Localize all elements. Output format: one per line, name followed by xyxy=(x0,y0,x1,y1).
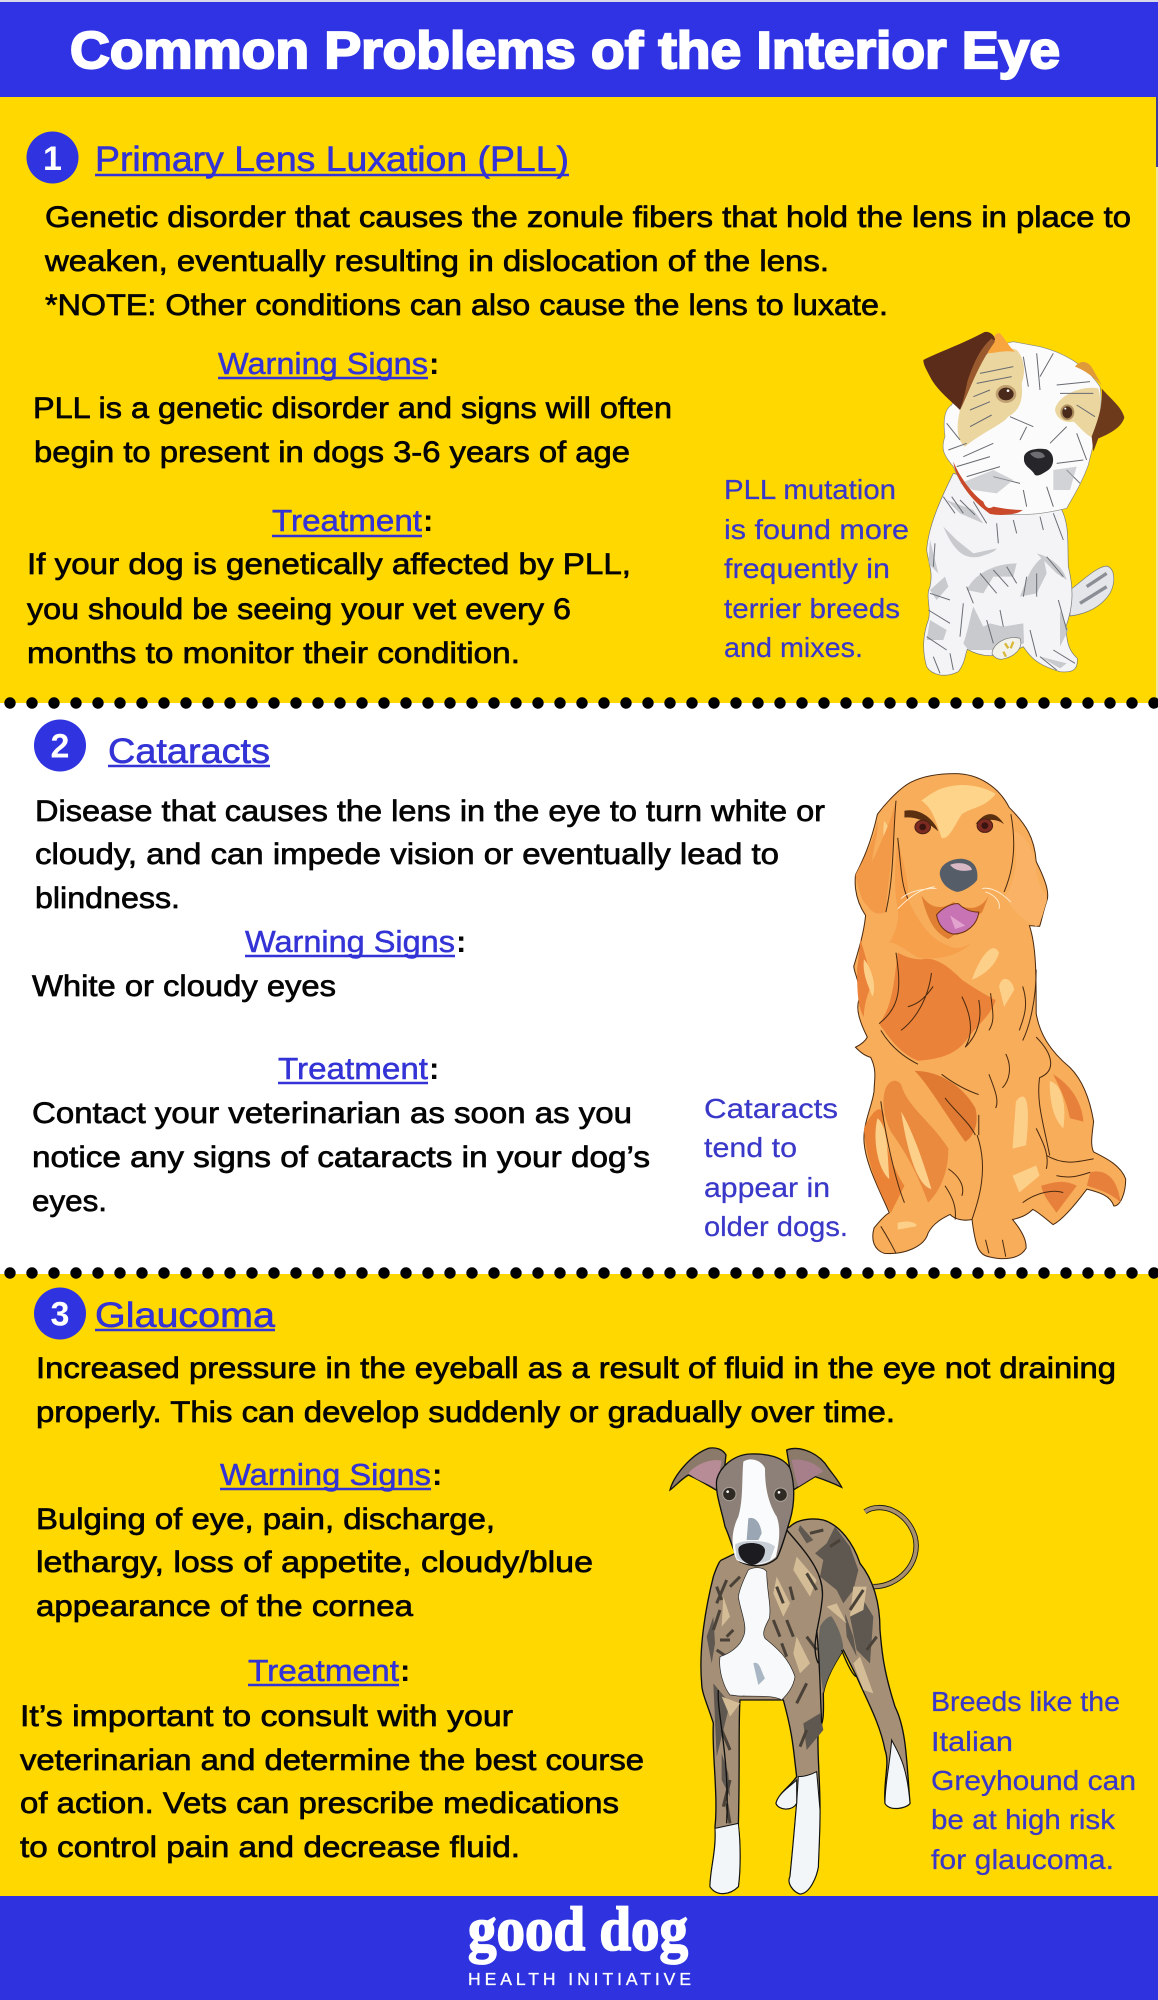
callout: terrier breeds note: terrier breeds xyxy=(724,593,900,624)
badge: number 3 xyxy=(34,1288,86,1340)
text block: PLL warning signs xyxy=(33,392,672,469)
text block: glaucoma treatment: It’s important to consult with your xyxy=(20,1700,513,1733)
subheading: cataracts warning signs: Warning Signs xyxy=(245,924,455,959)
subheading: PLL treatment: : xyxy=(423,503,433,538)
logo tagline: HEALTH INITIATIVE xyxy=(468,1969,691,1989)
text block: cataracts treatment: notice any signs of cataracts in your dog’s xyxy=(32,1141,650,1174)
callout: terrier breeds note: PLL mutation xyxy=(724,474,896,505)
callout: older dogs note xyxy=(704,1093,848,1242)
text block: PLL treatment: months to monitor their condition. xyxy=(27,637,520,670)
subheading: PLL warning signs: : xyxy=(429,346,439,381)
text block: cataracts warning signs: White or cloudy eyes xyxy=(32,970,336,1003)
text block: PLL treatment: you should be seeing your vet every 6 xyxy=(27,593,571,626)
badge: number 1: 1 xyxy=(43,140,62,178)
badge: number 3: 3 xyxy=(51,1296,69,1334)
callout: greyhound note: Greyhound can xyxy=(931,1765,1136,1796)
text block: cataracts description: cloudy, and can impede vision or eventually lead to xyxy=(35,838,779,871)
text block: glaucoma treatment xyxy=(20,1700,644,1864)
subheading: glaucoma treatment: : xyxy=(400,1653,410,1688)
text block: glaucoma description: Increased pressure in the eyeball as a result of fluid in the eye not draining xyxy=(36,1352,1116,1385)
divider: top dotted line xyxy=(4,697,1158,709)
badge: number 2 xyxy=(34,720,86,772)
subheading: PLL treatment: Treatment xyxy=(272,503,422,538)
text block: glaucoma treatment: to control pain and decrease fluid. xyxy=(20,1831,520,1864)
text block: cataracts treatment: eyes. xyxy=(32,1185,107,1218)
callout: older dogs note: Cataracts xyxy=(704,1093,838,1124)
text block: PLL treatment xyxy=(27,548,631,670)
text block: glaucoma description xyxy=(36,1352,1116,1429)
text block: glaucoma warning signs: Bulging of eye, pain, discharge, xyxy=(36,1503,495,1536)
text block: glaucoma warning signs: lethargy, loss of appetite, cloudy/blue xyxy=(36,1546,593,1579)
text block: cataracts description: Disease that causes the lens in the eye to turn white or xyxy=(35,795,825,828)
text block: cataracts treatment xyxy=(32,1097,650,1218)
subheading: cataracts treatment: Treatment xyxy=(278,1051,428,1086)
panel: glaucoma section xyxy=(0,1274,1158,1896)
callout: terrier breeds note: is found more xyxy=(724,514,909,545)
subheading: cataracts warning signs: : xyxy=(456,924,466,959)
logo: good dog: good dog xyxy=(468,1896,688,1964)
text block: glaucoma treatment: of action. Vets can prescribe medications xyxy=(20,1787,619,1820)
panel: PLL section xyxy=(0,97,1158,703)
text block: PLL description: Genetic disorder that causes the zonule fibers that hold the lens in place to xyxy=(45,201,1131,234)
text block: PLL warning signs: PLL is a genetic disorder and signs will often xyxy=(33,392,672,425)
text block: PLL warning signs: begin to present in dogs 3-6 years of age xyxy=(34,436,630,469)
panel: cataracts section xyxy=(0,709,1158,1274)
badge: number 2: 2 xyxy=(51,728,69,766)
text block: PLL treatment: If your dog is genetically affected by PLL, xyxy=(27,548,631,581)
divider: lower dotted line xyxy=(4,1267,1158,1279)
illustration: italian greyhound xyxy=(670,1448,916,1894)
callout: greyhound note: be at high risk xyxy=(931,1804,1116,1835)
subheading: PLL warning signs: Warning Signs xyxy=(218,346,428,381)
footer band with logo xyxy=(0,1896,1158,2000)
callout: greyhound note: for glaucoma. xyxy=(931,1844,1114,1875)
badge: number 1 xyxy=(26,132,78,184)
text block: glaucoma description: properly. This can develop suddenly or gradually over time. xyxy=(36,1396,895,1429)
text block: PLL description xyxy=(44,201,1131,322)
text block: PLL description: *NOTE: Other conditions can also cause the lens to luxate. xyxy=(45,289,888,322)
callout: greyhound note xyxy=(931,1686,1136,1875)
header band with title xyxy=(0,0,1158,97)
heading: Cataracts: Cataracts xyxy=(108,732,270,771)
illustration: terrier dog xyxy=(923,332,1124,675)
callout: older dogs note: appear in xyxy=(704,1172,830,1203)
heading: Primary Lens Luxation: Primary Lens Luxation (PLL) xyxy=(95,140,569,179)
subheading: glaucoma warning signs: Warning Signs xyxy=(220,1457,431,1492)
text block: cataracts description: blindness. xyxy=(35,882,180,915)
title: Common Problems of the Interior Eye xyxy=(70,22,1060,80)
callout: older dogs note: older dogs. xyxy=(704,1211,848,1242)
text block: PLL description: weaken, eventually resulting in dislocation of the lens. xyxy=(44,245,829,278)
callout: greyhound note: Italian xyxy=(931,1726,1013,1757)
callout: older dogs note: tend to xyxy=(704,1132,797,1163)
callout: terrier breeds note xyxy=(724,474,909,663)
text block: cataracts treatment: Contact your veterinarian as soon as you xyxy=(32,1097,632,1130)
subheading: cataracts treatment: : xyxy=(429,1051,439,1086)
text block: glaucoma treatment: veterinarian and determine the best course xyxy=(20,1744,644,1777)
heading: Glaucoma: Glaucoma xyxy=(95,1296,276,1335)
illustration: golden retriever xyxy=(854,774,1126,1259)
text block: glaucoma warning signs xyxy=(36,1503,593,1623)
callout: greyhound note: Breeds like the xyxy=(931,1686,1120,1717)
subheading: glaucoma warning signs: : xyxy=(432,1457,442,1492)
text block: glaucoma warning signs: appearance of the cornea xyxy=(36,1590,413,1623)
callout: terrier breeds note: frequently in xyxy=(724,553,890,584)
callout: terrier breeds note: and mixes. xyxy=(724,632,863,663)
subheading: glaucoma treatment: Treatment xyxy=(248,1653,399,1688)
text block: cataracts description xyxy=(35,795,825,915)
